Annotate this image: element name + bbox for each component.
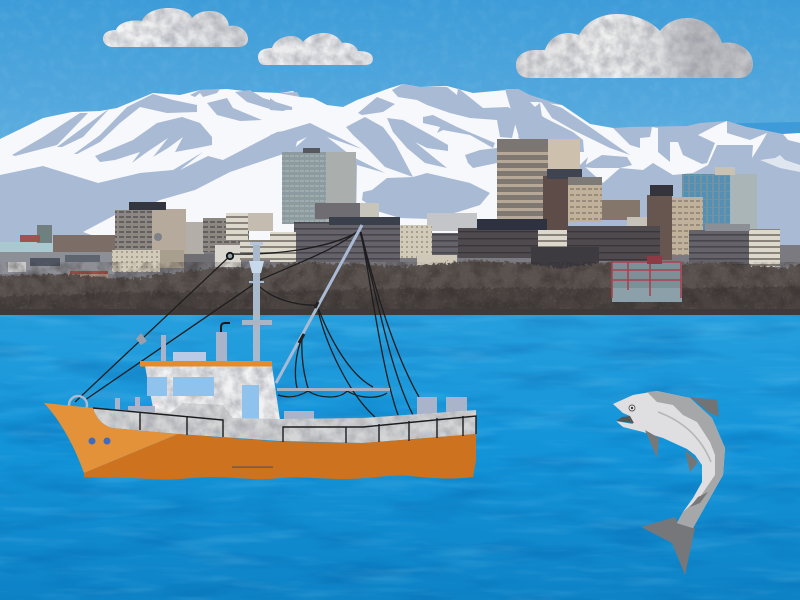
centre dark blocks <box>417 219 660 273</box>
deck boxes <box>115 397 467 420</box>
hull bow light orange <box>44 403 178 473</box>
left tan building <box>115 202 186 254</box>
mountain range <box>0 84 800 315</box>
belly line <box>658 412 711 462</box>
snow streaks right <box>530 102 767 200</box>
funnel <box>216 323 230 361</box>
ventral fin <box>685 450 698 472</box>
eye <box>629 405 635 411</box>
boom <box>276 225 362 383</box>
left mid building <box>203 213 273 252</box>
cloud left <box>103 8 248 47</box>
body <box>613 391 725 528</box>
glass tower <box>282 148 379 224</box>
right low building <box>689 224 780 268</box>
striped tower <box>497 139 580 221</box>
blue tower <box>682 167 757 230</box>
mast <box>242 242 272 362</box>
tail fin <box>641 517 695 575</box>
dorsal fin <box>690 397 719 417</box>
brown tower centre <box>543 169 602 232</box>
blue patch beside striped tower <box>530 108 584 152</box>
cloud middle <box>258 33 373 65</box>
portholes <box>88 438 110 444</box>
blue band across right snow <box>540 100 630 155</box>
snow patch far right top <box>783 133 800 143</box>
tree line <box>0 260 800 320</box>
water <box>0 315 800 600</box>
red framed building <box>612 256 682 302</box>
low town buildings <box>0 240 270 278</box>
blue base right <box>505 89 800 245</box>
cloud right <box>516 14 753 78</box>
bow ring <box>69 396 87 414</box>
centre shadow streaks <box>270 84 545 222</box>
pectoral fin <box>645 430 659 458</box>
waterline mark <box>232 466 273 468</box>
hull dark orange <box>84 434 476 480</box>
cabin <box>145 366 280 420</box>
sky background <box>0 0 800 240</box>
fishing boat <box>44 225 476 480</box>
blue lobe right <box>582 155 632 168</box>
wide office block <box>270 217 432 262</box>
leaping salmon <box>613 391 725 575</box>
cabin roof <box>140 361 272 366</box>
lower tail shading <box>690 492 708 507</box>
grey weight <box>136 333 147 345</box>
net rod <box>277 388 390 391</box>
snow base left and centre <box>0 84 560 245</box>
mouth <box>616 416 634 423</box>
black pulley ring <box>227 253 233 259</box>
rear railing <box>283 416 476 443</box>
knots on boom <box>299 302 318 343</box>
city skyline <box>0 139 800 320</box>
cabin-top fittings <box>161 335 206 361</box>
backdrop behind town <box>0 235 800 315</box>
rigging lines <box>75 231 419 417</box>
snow wisp far right <box>760 155 800 172</box>
left lower ridge <box>0 129 300 245</box>
grey deck and bulwark <box>93 403 476 443</box>
background buildings <box>0 200 649 256</box>
back shading <box>647 391 725 528</box>
brown tower right <box>647 185 703 260</box>
cabin windows <box>147 377 259 419</box>
front railing <box>93 408 223 437</box>
left shadow streaks <box>12 89 300 163</box>
